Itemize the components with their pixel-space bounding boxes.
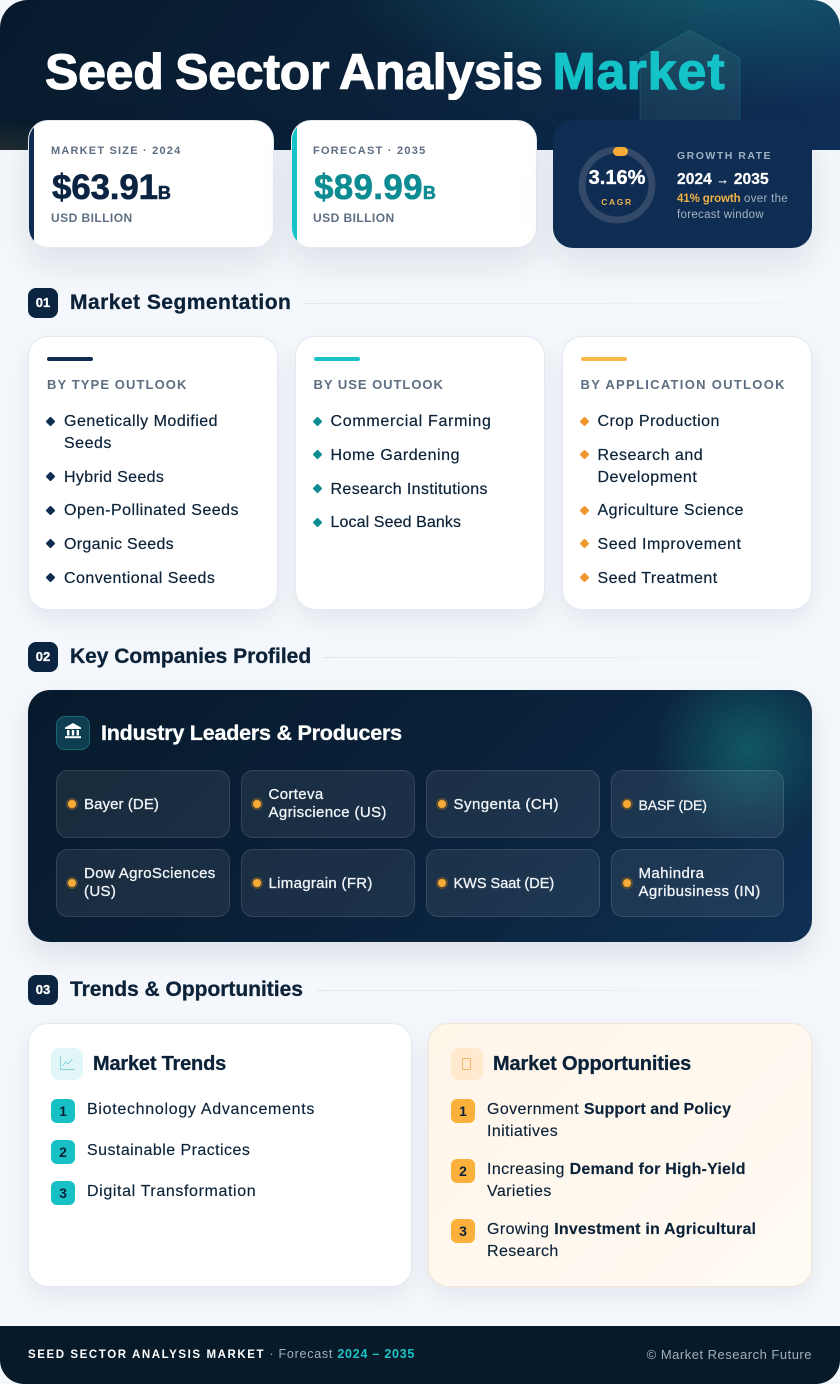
panel: industry leaders — [28, 690, 812, 942]
panel: by type outlook: Genetically Modified — [64, 413, 218, 430]
panel: by type outlook: Open-Pollinated Seeds — [64, 502, 239, 519]
panel: market opportunities: Government Support and Policy — [487, 1100, 731, 1118]
panel: market opportunities: Growing Investment in Agricultural — [487, 1220, 756, 1238]
company: BASF — [611, 770, 784, 838]
company: Bayer: Bayer (DE) — [84, 796, 159, 813]
panel: by application outlook: BY APPLICATION OUTLOOK — [580, 377, 786, 392]
panel: by type outlook: Conventional Seeds — [64, 570, 215, 587]
icon: chart — [51, 1048, 83, 1080]
section heading: trends: 03 — [36, 982, 50, 997]
stat card: forecast: FORECAST · 2035 — [313, 145, 426, 157]
panel: by application outlook: Crop Production — [598, 413, 720, 430]
header background — [0, 0, 840, 150]
title: Seed Sector Analysis Market — [45, 43, 726, 101]
section heading: market segmentation: Market Segmentation — [70, 291, 291, 314]
panel: market trends: 2 — [59, 1144, 67, 1160]
panel title: Industry Leaders & Producers — [101, 721, 402, 745]
growth note: 41% growth over the — [677, 193, 788, 205]
company: Limagrain — [241, 849, 415, 917]
growth note: forecast window — [677, 209, 764, 221]
panel: by use outlook: BY USE OUTLOOK — [314, 377, 444, 392]
panel: by use outlook: Home Gardening — [330, 447, 460, 464]
company: KWS — [426, 849, 600, 917]
panel: market trends — [28, 1023, 412, 1287]
company: Syngenta: Syngenta (CH) — [454, 796, 559, 813]
panel: market trends: Biotechnology Advancements — [87, 1100, 315, 1118]
company: Mahindra — [611, 849, 784, 917]
company: Corteva: Agriscience (US) — [268, 804, 387, 821]
footer left text: SEED SECTOR ANALYSIS MARKET · Forecast 2024 – 2035 — [28, 1347, 415, 1361]
company: Bayer — [56, 770, 230, 838]
section heading: market segmentation: 01 — [36, 295, 50, 310]
panel: market opportunities: 3 — [459, 1223, 467, 1239]
stat card: forecast: $89.99B — [314, 168, 436, 207]
icon: placeholder — [451, 1048, 483, 1080]
panel: by type outlook: Seeds — [64, 435, 112, 452]
panel: market opportunities: Research — [487, 1242, 559, 1260]
decorative hexagon — [640, 30, 740, 120]
company: KWS: KWS Saat (DE) — [454, 876, 554, 892]
stat card: market size — [28, 120, 274, 248]
panel: by use outlook: Local Seed Banks — [330, 514, 461, 531]
section heading: market segmentation — [28, 288, 668, 318]
panel: by application outlook: Seed Treatment — [598, 570, 718, 587]
panel: by type outlook: Hybrid Seeds — [64, 469, 164, 486]
icon: bank — [56, 716, 90, 750]
CAGR value: 3.16% — [589, 167, 645, 189]
panel: by application outlook: Agriculture Science — [598, 502, 744, 519]
section heading: trends: Trends & Opportunities — [70, 978, 303, 1001]
panel: market opportunities: 2 — [459, 1163, 467, 1179]
company: Corteva: Corteva — [268, 786, 324, 803]
panel: by use outlook: Research Institutions — [330, 481, 488, 498]
section heading: trends — [28, 975, 672, 1005]
section heading: key companies: 02 — [36, 649, 50, 664]
company: Limagrain: Limagrain (FR) — [268, 875, 373, 892]
company: Corteva — [241, 770, 415, 838]
footer right text: © Market Research Future — [647, 1347, 812, 1362]
company: Mahindra: Mahindra — [638, 865, 704, 882]
company: BASF: BASF (DE) — [638, 797, 707, 813]
stat card: forecast — [291, 120, 537, 248]
panel: market trends: Digital Transformation — [87, 1182, 256, 1200]
company: Mahindra: Agribusiness (IN) — [638, 883, 761, 900]
stat card: growth rate — [553, 120, 812, 248]
growth years: 2024 → 2035 — [677, 171, 769, 188]
section heading: key companies: Key Companies Profiled — [70, 645, 311, 668]
opportunities title: Market Opportunities — [493, 1053, 691, 1075]
panel: market trends: 3 — [59, 1185, 67, 1201]
CAGR ring — [578, 146, 656, 224]
stat card: market size: $63.91B — [52, 168, 171, 207]
panel: by application outlook: Research and — [598, 447, 703, 464]
panel: market opportunities — [428, 1023, 812, 1287]
panel: market opportunities: 1 — [459, 1103, 467, 1119]
panel: by type outlook: BY TYPE OUTLOOK — [47, 377, 188, 392]
company: Dow: (US) — [84, 883, 116, 900]
panel: by use outlook: Commercial Farming — [330, 413, 492, 430]
company: Syngenta — [426, 770, 600, 838]
stat card: market size: USD BILLION — [51, 211, 133, 225]
growth rate label: GROWTH RATE — [677, 150, 772, 162]
stat card: market size: MARKET SIZE · 2024 — [51, 145, 181, 157]
panel: by type outlook — [28, 336, 278, 610]
panel: market trends: 1 — [59, 1103, 67, 1119]
panel: market opportunities: Initiatives — [487, 1122, 558, 1140]
panel: by application outlook — [562, 336, 812, 610]
panel: by type outlook: Organic Seeds — [64, 536, 174, 553]
panel: market trends: Sustainable Practices — [87, 1142, 250, 1158]
trends title: Market Trends — [93, 1053, 226, 1075]
panel: by use outlook — [295, 336, 545, 610]
panel: by application outlook: Development — [598, 469, 697, 486]
company: Dow — [56, 849, 230, 917]
panel: by application outlook: Seed Improvement — [598, 536, 741, 553]
section heading: key companies — [28, 642, 676, 672]
CAGR label: CAGR — [601, 197, 633, 207]
footer — [0, 1326, 840, 1384]
panel: market opportunities: Varieties — [487, 1182, 552, 1200]
growth note — [677, 193, 788, 221]
panel: market opportunities: Increasing Demand for High-Yield — [487, 1160, 746, 1178]
stat card: forecast: USD BILLION — [313, 211, 395, 225]
company: Dow: Dow AgroSciences — [84, 865, 216, 882]
